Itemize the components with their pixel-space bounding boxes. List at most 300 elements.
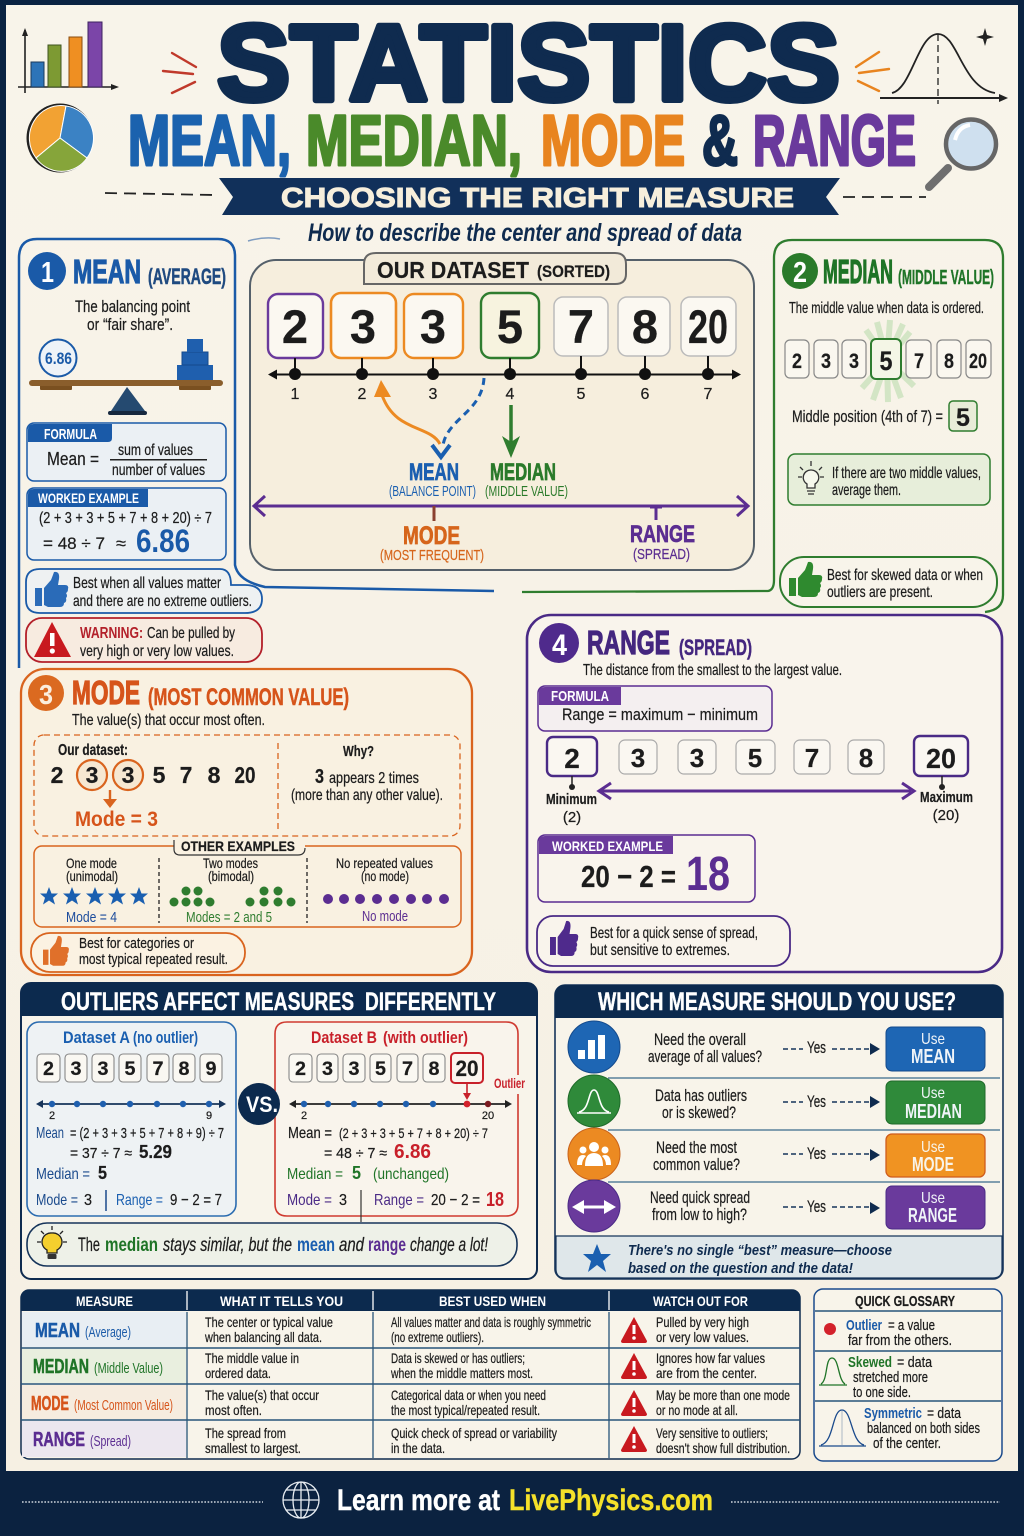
other examples: OTHER EXAMPLES [181, 838, 295, 854]
dataset a: 3 [70, 1059, 82, 1080]
heading: mean: MEAN [73, 253, 141, 290]
dataset b: 2 [301, 1110, 307, 1122]
takeaway callout [27, 1223, 517, 1266]
worked example: mean: (2 + 3 + 3 + 5 + 7 + 8 + 20) ÷ 7 [39, 510, 212, 527]
row: range [568, 1180, 985, 1232]
subtitle: mean, median, mode and range: RANGE [753, 102, 916, 181]
dataset a: 2 [49, 1110, 55, 1122]
dataset a: = 37 ÷ 7 ≈ [70, 1145, 132, 1162]
our dataset and why: (more than any other value). [291, 787, 443, 804]
table row: range: doesn't show full distribution. [656, 1440, 790, 1456]
data cards: 20 [688, 300, 728, 353]
table header: BEST USED WHEN [439, 1293, 546, 1309]
table row: mean: All values matter and data is roughly symmetric [391, 1314, 591, 1330]
dataset a: Median = [36, 1166, 90, 1183]
icon: red accent strokes [163, 53, 196, 93]
our dataset and why: 3 [122, 762, 134, 788]
dataset b: Median = [287, 1166, 343, 1183]
dataset a: 5.29 [139, 1142, 172, 1162]
panel: median [522, 240, 1003, 612]
takeaway callout: and [339, 1235, 365, 1256]
dataset a: 9 [206, 1059, 216, 1080]
formula box: mean: number of values [112, 462, 205, 479]
dataset a: Mode = [36, 1192, 78, 1209]
dataset b: 3 [348, 1059, 360, 1080]
worked example: mean: WORKED EXAMPLE [38, 490, 139, 506]
dataset a: 8 [178, 1059, 190, 1080]
dataset b: 20 [482, 1110, 494, 1122]
warning: mean: very high or very low values. [80, 643, 234, 660]
dataset a: Mean [36, 1125, 64, 1142]
data cards with minimum and maximum: 20 [926, 743, 956, 774]
vs badge: VS. [246, 1092, 278, 1117]
icon: pie chart [26, 104, 94, 172]
table row: mean: MEAN [35, 1320, 80, 1342]
row: mode: common value? [653, 1155, 740, 1174]
dataset b: = 48 ÷ 7 ≈ [324, 1145, 387, 1162]
best use: mode: Best for categories or [79, 935, 194, 952]
our dataset and why: appears 2 times [329, 770, 419, 787]
glossary: skewed: stretched more [853, 1369, 928, 1386]
subtitle: mean, median, mode and range: & [702, 102, 738, 181]
glossary: symmetric: = data [927, 1405, 962, 1422]
icon: orange accent strokes [856, 52, 889, 91]
table row: range: smallest to largest. [205, 1440, 301, 1456]
table row: median: are from the center. [656, 1365, 757, 1381]
panel: mean [19, 239, 494, 668]
text: range definition: The distance from the smallest to the largest value. [583, 662, 842, 679]
best use: mode [31, 933, 245, 972]
number line: 2 [358, 386, 367, 403]
row: range: Use [921, 1190, 945, 1207]
label: mean [389, 459, 476, 500]
label: mode [380, 522, 484, 564]
worked example: mean: = 48 ÷ 7 [43, 534, 105, 553]
subtitle: mean, median, mode and range: MEAN, [128, 102, 291, 181]
dataset b: 5 [352, 1163, 361, 1183]
worked example: mean: ≈ [116, 534, 126, 553]
middle position result: Middle position (4th of 7) = [792, 407, 943, 426]
dataset b: Range = [374, 1192, 424, 1209]
data cards: 5 [497, 300, 523, 353]
tip: two middle values: average them. [832, 482, 901, 499]
dataset b: 3 [339, 1192, 347, 1209]
table row: mode: (Most Common Value) [74, 1397, 173, 1414]
data cards: 7 [568, 300, 594, 353]
takeaway callout: The [78, 1235, 100, 1256]
data cards with minimum and maximum: 3 [690, 743, 704, 773]
label: range: (SPREAD) [633, 546, 690, 563]
row: range: from low to high? [652, 1205, 747, 1224]
ordered values with middle highlighted: 3 [821, 350, 831, 373]
dataset a: 9 [206, 1110, 212, 1122]
dataset b: Mean = [288, 1125, 332, 1142]
heading: our dataset [364, 253, 626, 284]
text: mean definition: or “fair share”. [87, 315, 173, 334]
data cards with minimum and maximum [546, 736, 973, 826]
number line [268, 356, 741, 403]
our dataset and why: 3 [315, 766, 324, 788]
our dataset and why: 7 [180, 762, 192, 788]
ordered values with middle highlighted: 20 [969, 350, 987, 373]
best use: range [537, 916, 790, 966]
dataset b: 6.86 [394, 1141, 431, 1163]
dataset b [275, 1022, 525, 1222]
dataset a: 7 [152, 1059, 164, 1080]
glossary title: QUICK GLOSSARY [855, 1293, 955, 1310]
table row: mean: when balancing all data. [204, 1329, 322, 1345]
one mode: (unimodal) [66, 868, 118, 884]
closing note: based on the question and the data! [628, 1260, 853, 1277]
ordered values with middle highlighted: 3 [849, 350, 859, 373]
closing note [556, 1236, 1002, 1278]
dataset a: (no outlier) [133, 1028, 198, 1047]
glossary: skewed: to one side. [853, 1384, 911, 1401]
panel: range [527, 615, 1002, 972]
table row: range: Very sensitive to outliers; [656, 1425, 768, 1441]
footer call to action: Learn more at [337, 1484, 500, 1517]
row: mode: Need the most [656, 1138, 737, 1157]
our dataset and why: Our dataset: [58, 742, 128, 759]
no mode [323, 855, 449, 925]
data cards with minimum and maximum: 8 [859, 743, 873, 773]
icon: magnifying glass [929, 120, 996, 187]
dataset a: 5 [98, 1163, 107, 1183]
label: range: RANGE [630, 521, 695, 548]
title: STATISTICS [217, 2, 840, 123]
our dataset and why: 3 [86, 762, 98, 788]
row: median: Data has outliers [655, 1086, 747, 1105]
banner: choosing the right measure: CHOOSING THE RIGHT MEASURE [281, 182, 794, 213]
row: mean: MEAN [911, 1046, 955, 1068]
two modes: Two modes [203, 855, 258, 871]
row: median: Use [921, 1085, 945, 1102]
table row: range: in the data. [391, 1440, 445, 1456]
heading: median: 2 [793, 257, 807, 289]
table row: median: (Middle Value) [94, 1360, 163, 1377]
dataset a: Dataset A [63, 1028, 130, 1047]
table row: range: The spread from [205, 1425, 286, 1441]
dataset b: Dataset B [311, 1028, 377, 1047]
row: range: RANGE [908, 1205, 957, 1227]
heading: outliers: OUTLIERS AFFECT MEASURES DIFFERENTLY [61, 988, 496, 1016]
table row: range: Quick check of spread or variability [391, 1425, 557, 1441]
our dataset and why [34, 735, 460, 836]
subtitle: mean, median, mode and range [128, 102, 916, 181]
dataset b: Outlier [494, 1075, 525, 1091]
number line: 5 [577, 386, 586, 403]
dataset b: 2 [295, 1059, 306, 1080]
heading: range: (SPREAD) [679, 635, 752, 660]
arrow: dashed blue to mean [432, 378, 484, 457]
dataset b: (unchanged) [373, 1166, 449, 1183]
takeaway callout: range [368, 1235, 406, 1256]
row: mode: MODE [912, 1154, 954, 1176]
ordered values with middle highlighted: 7 [914, 350, 924, 373]
data cards with minimum and maximum: (20) [933, 807, 959, 824]
icon: bell curve [880, 28, 1008, 104]
row: mean: average of all values? [648, 1047, 762, 1066]
heading: our dataset: OUR DATASET [377, 257, 529, 283]
our dataset and why: 20 [234, 762, 256, 788]
two modes: (bimodal) [208, 868, 254, 884]
dataset a: Range = [116, 1192, 163, 1209]
tagline: How to describe the center and spread of data [308, 219, 742, 247]
glossary: skewed: = data [897, 1354, 933, 1371]
middle position result [792, 401, 977, 432]
glossary: outlier: Outlier [846, 1317, 882, 1334]
table row: median: when the middle matters most. [390, 1365, 533, 1381]
row: range: Need quick spread [650, 1188, 750, 1207]
data cards: 3 [420, 300, 446, 353]
warning: mean: Can be pulled by [147, 625, 235, 642]
no mode: No repeated values [336, 855, 433, 871]
table row: mean: The center or typical value [205, 1314, 333, 1330]
glossary: symmetric: Symmetric [864, 1405, 922, 1422]
ordered values with middle highlighted [785, 320, 991, 402]
arrow: green to median [502, 405, 520, 458]
dataset b: 3 [322, 1059, 333, 1080]
table header: WHAT IT TELLS YOU [220, 1293, 343, 1309]
heading: mode: 3 [39, 679, 53, 710]
table row: mode [31, 1387, 790, 1418]
worked example: range [538, 835, 755, 902]
table row: mode: most often. [205, 1402, 262, 1418]
heading: range [539, 623, 752, 663]
footer call to action [337, 1484, 713, 1517]
takeaway callout: median [105, 1235, 158, 1256]
best use: range: Best for a quick sense of spread, [590, 925, 758, 942]
data cards with minimum and maximum: 3 [631, 743, 645, 773]
table row: median [33, 1350, 765, 1381]
our dataset and why: Mode = 3 [75, 808, 158, 831]
formula box: mean: Mean = [47, 449, 99, 469]
glossary: outlier [824, 1317, 952, 1349]
footer [0, 1471, 1024, 1536]
label: mode: MODE [403, 522, 460, 550]
table row: mode: MODE [31, 1393, 69, 1415]
row: mean: Yes [807, 1038, 826, 1057]
row: median [568, 1075, 985, 1127]
data cards: 3 [350, 300, 376, 353]
table row: median: Data is skewed or has outliers; [391, 1350, 525, 1366]
table header: MEASURE [76, 1293, 133, 1309]
data cards with minimum and maximum: 2 [564, 743, 580, 774]
heading: mean: (AVERAGE) [148, 264, 226, 289]
table header: WATCH OUT FOR [653, 1293, 748, 1309]
tip: two middle values [788, 454, 990, 505]
row: mode [568, 1128, 985, 1180]
row: median: Yes [807, 1092, 826, 1111]
dataset a: 3 [98, 1059, 108, 1080]
row: mean [568, 1021, 985, 1073]
glossary: symmetric: balanced on both sides [867, 1420, 980, 1437]
panel: mode [21, 669, 472, 975]
ordered values with middle highlighted: 5 [880, 346, 892, 376]
closing note: There's no single “best” measure—choose [628, 1242, 892, 1259]
heading: mean [28, 252, 226, 290]
data cards: 8 [632, 300, 658, 353]
row: mode: Yes [807, 1144, 826, 1163]
glossary: outlier: far from the others. [848, 1332, 952, 1349]
warning: mean: WARNING: [80, 625, 143, 642]
heading: outliers [21, 983, 537, 1016]
panel: quick glossary [814, 1289, 1002, 1461]
glossary: symmetric: of the center. [873, 1435, 941, 1452]
dataset a: = (2 + 3 + 3 + 5 + 7 + 8 + 9) ÷ 7 [70, 1125, 224, 1142]
title [128, 2, 916, 181]
one mode [40, 855, 148, 926]
table: comparison of measures [21, 1290, 800, 1459]
table header [21, 1290, 800, 1311]
dataset b: (with outlier) [383, 1028, 468, 1047]
label: range [630, 521, 695, 563]
table row: mode: the most typical/repeated result. [391, 1402, 540, 1418]
ordered values with middle highlighted: 8 [944, 350, 954, 373]
worked example: mean: 6.86 [136, 523, 190, 559]
table row: range [33, 1425, 790, 1456]
subtitle: mean, median, mode and range: MODE [541, 102, 685, 181]
best use: median [780, 557, 997, 607]
subtitle: mean, median, mode and range: MEDIAN, [306, 102, 522, 181]
formula box: range: FORMULA [551, 688, 609, 705]
vs badge [238, 1083, 280, 1125]
label: mode: (MOST FREQUENT) [380, 547, 484, 564]
best use: median: outliers are present. [827, 584, 933, 601]
worked example: range: WORKED EXAMPLE [552, 838, 663, 854]
glossary: outlier: = a value [888, 1317, 935, 1334]
table row: mean [35, 1314, 749, 1345]
one mode: One mode [66, 855, 117, 871]
icon: balance scale [29, 339, 223, 415]
no mode: (no mode) [361, 868, 409, 884]
heading: range: 4 [552, 629, 567, 662]
label: mean: MEAN [409, 459, 459, 486]
text: mean definition: The balancing point [75, 297, 190, 316]
data cards with minimum and maximum: 7 [805, 743, 819, 773]
best use: mean: Best when all values matter [73, 575, 222, 592]
row: median: MEDIAN [905, 1101, 962, 1123]
middle position result: 5 [956, 404, 970, 432]
our dataset and why: 2 [51, 762, 63, 788]
glossary: symmetric [819, 1405, 980, 1452]
table row: range: RANGE [33, 1429, 85, 1451]
dataset b: 18 [486, 1189, 504, 1211]
dataset b: Mode = [287, 1192, 332, 1209]
table row: mode: May be more than one mode [656, 1387, 790, 1403]
heading: range: RANGE [587, 624, 670, 661]
label: median: (MIDDLE VALUE) [485, 483, 568, 500]
formula box: range: Range = maximum − minimum [562, 705, 758, 724]
table row: median: ordered data. [205, 1365, 271, 1381]
number line: 3 [429, 386, 438, 403]
label: median: MEDIAN [490, 459, 556, 486]
warning: mean [26, 618, 262, 662]
heading: mean: 1 [41, 257, 54, 289]
data cards with minimum and maximum: Maximum [920, 789, 973, 806]
heading: mode: MODE [72, 674, 140, 711]
text: mode definition: The value(s) that occur most often. [72, 712, 265, 729]
two modes: Modes = 2 and 5 [186, 909, 272, 926]
our dataset and why: 5 [153, 762, 166, 788]
table row: median: Ignores how far values [656, 1350, 765, 1366]
dataset a [27, 1022, 236, 1216]
dataset b: 5 [375, 1059, 386, 1080]
table row: mode: Categorical data or when you need [391, 1387, 546, 1403]
number line: 7 [704, 386, 713, 403]
data cards [268, 293, 736, 358]
heading: median: MEDIAN [823, 253, 893, 290]
arrow: range span [254, 496, 748, 521]
table row: mode: or no mode at all. [656, 1402, 738, 1418]
dataset a: 2 [43, 1059, 54, 1080]
banner: choosing the right measure [219, 178, 840, 215]
one mode: Mode = 4 [66, 909, 117, 926]
our dataset and why: Why? [343, 743, 374, 760]
heading: median [782, 253, 994, 290]
dataset b: 20 − 2 = [431, 1192, 480, 1209]
table row: mean: (no extreme outliers). [391, 1329, 484, 1345]
dataset b: (2 + 3 + 3 + 5 + 7 + 8 + 20) ÷ 7 [339, 1125, 488, 1141]
data cards with minimum and maximum: (2) [563, 809, 581, 826]
best use: mode: most typical repeated result. [79, 951, 228, 968]
text: mean definition [75, 297, 190, 334]
formula box: mean [27, 423, 226, 481]
heading: mode [28, 674, 349, 711]
number line: 1 [291, 386, 300, 403]
row: mean: Need the overall [654, 1030, 746, 1049]
dataset a: 9 − 2 = 7 [170, 1192, 222, 1209]
footer call to action: LivePhysics.com [509, 1484, 713, 1517]
table row: mean: (Average) [85, 1324, 131, 1341]
icon: globe [283, 1482, 319, 1518]
dataset a: 3 [84, 1192, 92, 1209]
panel: which measure should you use [555, 985, 1003, 1279]
row: range: Yes [807, 1197, 826, 1216]
label: mean: (BALANCE POINT) [389, 483, 476, 500]
heading: mode: (MOST COMMON VALUE) [148, 684, 349, 711]
dataset a: 5 [124, 1059, 136, 1080]
two modes [170, 855, 296, 926]
other examples [34, 838, 461, 927]
row: median: or is skewed? [662, 1103, 736, 1122]
icon: balance scale: 6.86 [45, 349, 72, 368]
worked example: range: 18 [686, 848, 730, 901]
data cards: 2 [282, 300, 308, 353]
no mode: No mode [362, 908, 408, 925]
number line: 6 [641, 386, 650, 403]
dataset b: 7 [402, 1059, 413, 1080]
number line: 4 [506, 386, 515, 403]
formula box: mean: FORMULA [44, 426, 97, 443]
table row: median: MEDIAN [33, 1356, 89, 1378]
data cards with minimum and maximum: 5 [748, 743, 762, 773]
table row: mean: Pulled by very high [656, 1314, 749, 1330]
worked example: mean [27, 488, 226, 560]
our dataset and why: 8 [208, 762, 221, 788]
formula box: range [538, 686, 772, 731]
best use: range: but sensitive to extremes. [590, 942, 730, 959]
data cards with minimum and maximum: Minimum [546, 791, 597, 808]
glossary: skewed: Skewed [848, 1354, 892, 1371]
table row: mode: The value(s) that occur [205, 1387, 319, 1403]
panel: our dataset [250, 253, 754, 570]
table row: median: The middle value in [205, 1350, 299, 1366]
row: mode: Use [921, 1139, 945, 1156]
worked example: range: 20 − 2 = [581, 859, 676, 894]
row: mean: Use [921, 1031, 945, 1048]
best use: mean [26, 569, 262, 613]
